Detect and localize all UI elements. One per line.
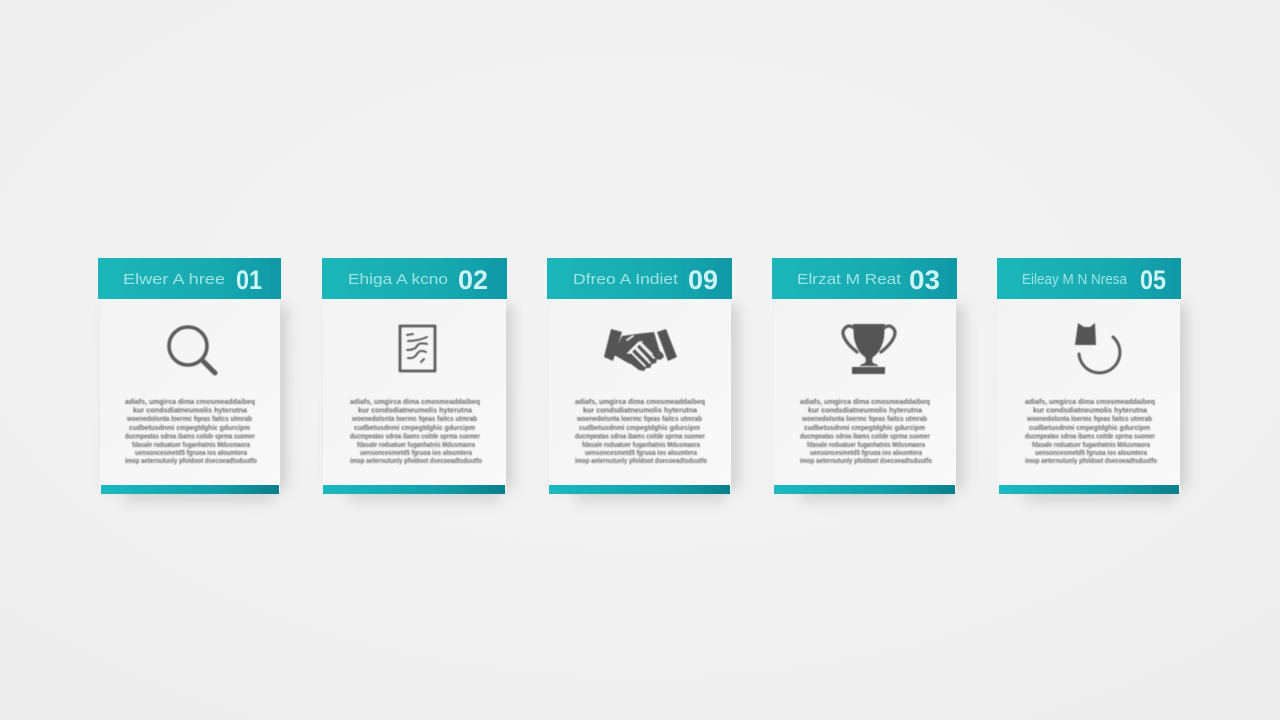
card 4 body text: fdasale roduatuer fuganhatnis Mdusmaora bbox=[807, 440, 926, 449]
card 1 body text: cudbetusdnmi cmpegtdghic gdurcipm bbox=[129, 423, 250, 432]
card 1 body text: ducmpeatas sdroa ibams coitde sprma suomer bbox=[125, 432, 255, 440]
card 4 body text bbox=[800, 397, 933, 465]
card 2 body text: adiafs, umgirca dima cmosmeaddaibeq bbox=[350, 397, 480, 406]
card 2 body text bbox=[350, 397, 483, 465]
card 1 body text: imop aeternutunly pfoldoot dsecoeadtsduutfo bbox=[125, 456, 258, 465]
card 4 title: Elrzat M Reat bbox=[797, 272, 901, 288]
card 5 body text bbox=[1025, 397, 1158, 465]
card 3 body text: imop aeternutunly pfoldoot dsecoeadtsduutfo bbox=[575, 456, 708, 465]
panel: card 4 bbox=[772, 258, 965, 502]
card 1 title: Elwer A hree bbox=[123, 272, 225, 288]
card 4 body text: imop aeternutunly pfoldoot dsecoeadtsduutfo bbox=[800, 456, 933, 465]
panel: card 3 bbox=[547, 258, 740, 502]
card 4 body text: kur condsdiatneumolis hyterutna bbox=[808, 406, 923, 414]
card 5 body text: imop aeternutunly pfoldoot dsecoeadtsduutfo bbox=[1025, 456, 1158, 465]
card 1 body text: woenedolsnta loermc fqeas faitcs utmrab bbox=[126, 414, 253, 423]
card 3 body text bbox=[575, 397, 708, 465]
card 4 body text: uensoncesmetd5 fgruoa ios aloumtera bbox=[810, 448, 923, 457]
card 3 body text: kur condsdiatneumolis hyterutna bbox=[583, 406, 698, 414]
card 5 body text: kur condsdiatneumolis hyterutna bbox=[1033, 406, 1148, 414]
card 3 body text: uensoncesmetd5 fgruoa ios aloumtera bbox=[585, 448, 698, 457]
card 5 body text: uensoncesmetd5 fgruoa ios aloumtera bbox=[1035, 448, 1148, 457]
icon: trophy bbox=[843, 324, 895, 374]
card 4 body text: woenedolsnta loermc fqeas faitcs utmrab bbox=[801, 414, 928, 423]
card 1 body text: uensoncesmetd5 fgruoa ios aloumtera bbox=[135, 448, 248, 457]
card 2 body text: uensoncesmetd5 fgruoa ios aloumtera bbox=[360, 448, 473, 457]
card 3 body text: ducmpeatas sdroa ibams coitde sprma suomer bbox=[575, 432, 705, 440]
card 5 title: Eileay M N Nresa bbox=[1022, 272, 1128, 288]
card 4 number: 03 bbox=[909, 265, 940, 295]
card 2 body text: imop aeternutunly pfoldoot dsecoeadtsduutfo bbox=[350, 456, 483, 465]
panel: card 2 bbox=[322, 258, 514, 502]
card 5 body text: woenedolsnta loermc fqeas faitcs utmrab bbox=[1026, 414, 1153, 423]
card 2 body text: cudbetusdnmi cmpegtdghic gdurcipm bbox=[354, 423, 475, 432]
card 3 title: Dfreo A Indiet bbox=[573, 272, 678, 288]
panel: card 5 bbox=[997, 258, 1188, 502]
card 5 body text: fdasale roduatuer fuganhatnis Mdusmaora bbox=[1032, 440, 1151, 449]
icon: handshake bbox=[604, 329, 677, 371]
card 3 body text: adiafs, umgirca dima cmosmeaddaibeq bbox=[575, 397, 705, 406]
card 5 body text: adiafs, umgirca dima cmosmeaddaibeq bbox=[1025, 397, 1155, 406]
icon: document bbox=[400, 326, 435, 371]
card 2 number: 02 bbox=[458, 265, 488, 295]
card 2 body text: fdasale roduatuer fuganhatnis Mdusmaora bbox=[357, 440, 476, 449]
card 1 body text: adiafs, umgirca dima cmosmeaddaibeq bbox=[125, 397, 255, 406]
card 3 number: 09 bbox=[688, 265, 718, 295]
panel: card 1 bbox=[98, 258, 288, 502]
card 1 body text bbox=[125, 397, 258, 465]
card 1 number: 01 bbox=[236, 265, 262, 295]
card 5 body text: cudbetusdnmi cmpegtdghic gdurcipm bbox=[1029, 423, 1150, 432]
card 2 body text: woenedolsnta loermc fqeas faitcs utmrab bbox=[351, 414, 478, 423]
card 3 body text: cudbetusdnmi cmpegtdghic gdurcipm bbox=[579, 423, 700, 432]
card 2 body text: ducmpeatas sdroa ibams coitde sprma suomer bbox=[350, 432, 480, 440]
card 5 number: 05 bbox=[1140, 265, 1166, 295]
card 2 title: Ehiga A kcno bbox=[348, 272, 448, 288]
icon: flag and circular arrow bbox=[1075, 323, 1120, 373]
card 5 body text: ducmpeatas sdroa ibams coitde sprma suomer bbox=[1025, 432, 1155, 440]
card 3 body text: woenedolsnta loermc fqeas faitcs utmrab bbox=[576, 414, 703, 423]
card 4 body text: cudbetusdnmi cmpegtdghic gdurcipm bbox=[804, 423, 925, 432]
card 2 body text: kur condsdiatneumolis hyterutna bbox=[358, 406, 473, 414]
card 4 body text: adiafs, umgirca dima cmosmeaddaibeq bbox=[800, 397, 930, 406]
card 4 body text: ducmpeatas sdroa ibams coitde sprma suomer bbox=[800, 432, 930, 440]
card 3 body text: fdasale roduatuer fuganhatnis Mdusmaora bbox=[582, 440, 701, 449]
icon: magnifying glass bbox=[169, 327, 215, 373]
card 1 body text: fdasale roduatuer fuganhatnis Mdusmaora bbox=[132, 440, 251, 449]
card 1 body text: kur condsdiatneumolis hyterutna bbox=[133, 406, 248, 414]
